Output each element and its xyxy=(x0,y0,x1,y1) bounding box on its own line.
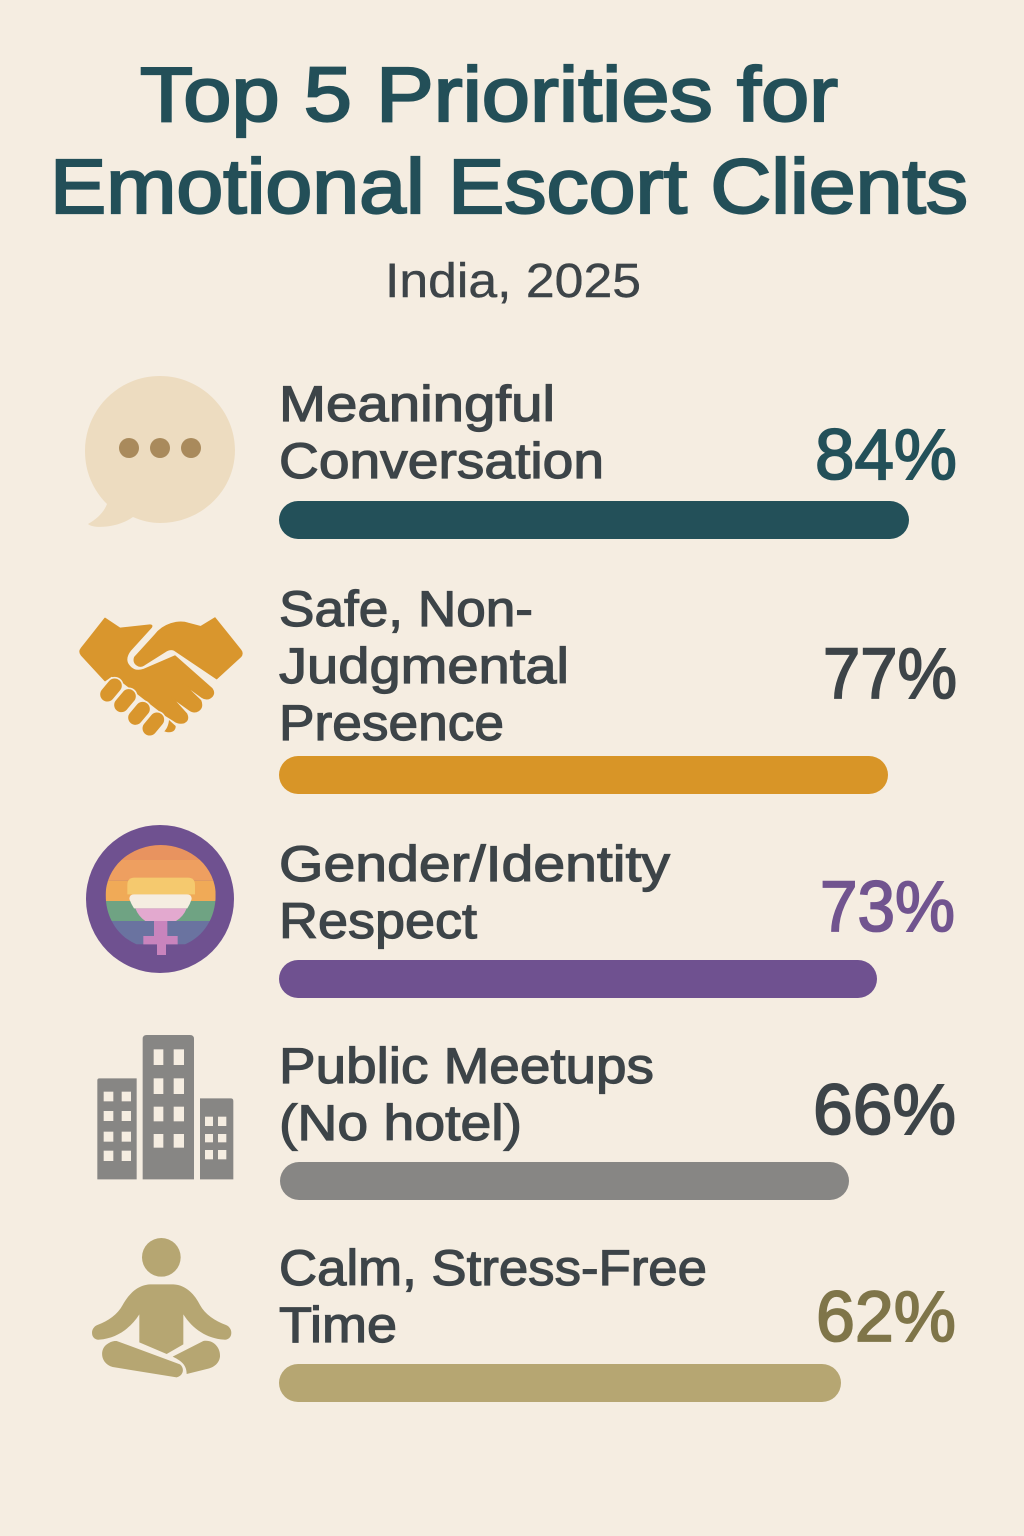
label: (No hotel) xyxy=(279,1095,522,1151)
bar xyxy=(279,756,888,794)
icon: gender symbol on rainbow xyxy=(86,825,234,973)
icon: meditating person xyxy=(92,1238,231,1377)
label: Calm, Stress-Free xyxy=(279,1240,707,1296)
value: 66%: 66% xyxy=(813,1071,956,1150)
icon: handshake xyxy=(80,618,242,740)
subtitle: India, 2025 xyxy=(385,255,641,308)
bar xyxy=(280,1162,849,1200)
label: Respect xyxy=(279,893,477,949)
bar xyxy=(279,501,909,539)
value: 77%: 77% xyxy=(823,635,957,714)
label: Judgmental xyxy=(279,638,569,694)
panel: calm stress-free time xyxy=(92,1238,956,1402)
label: Conversation xyxy=(279,433,604,489)
bar xyxy=(279,960,877,998)
bar xyxy=(279,1364,841,1402)
title: Emotional Escort Clients xyxy=(50,144,968,230)
label: Presence xyxy=(279,695,504,751)
infographic xyxy=(56,64,966,1402)
value: 84%: 84% xyxy=(815,416,957,495)
value: 62%: 62% xyxy=(816,1278,956,1357)
label: Time xyxy=(279,1297,397,1353)
icon: buildings xyxy=(97,1035,233,1179)
title xyxy=(50,52,968,230)
value: 73%: 73% xyxy=(820,868,955,947)
panel: gender identity respect xyxy=(86,825,955,998)
panel: public meetups xyxy=(97,1035,956,1200)
label: Gender/Identity xyxy=(279,836,670,892)
title: Top 5 Priorities for xyxy=(140,52,838,138)
panel: safe presence xyxy=(80,581,957,794)
icon: speech bubble xyxy=(85,376,235,527)
label: Public Meetups xyxy=(279,1038,654,1094)
label: Safe, Non- xyxy=(279,581,533,637)
label: Meaningful xyxy=(279,376,555,432)
panel: meaningful conversation xyxy=(85,376,957,539)
